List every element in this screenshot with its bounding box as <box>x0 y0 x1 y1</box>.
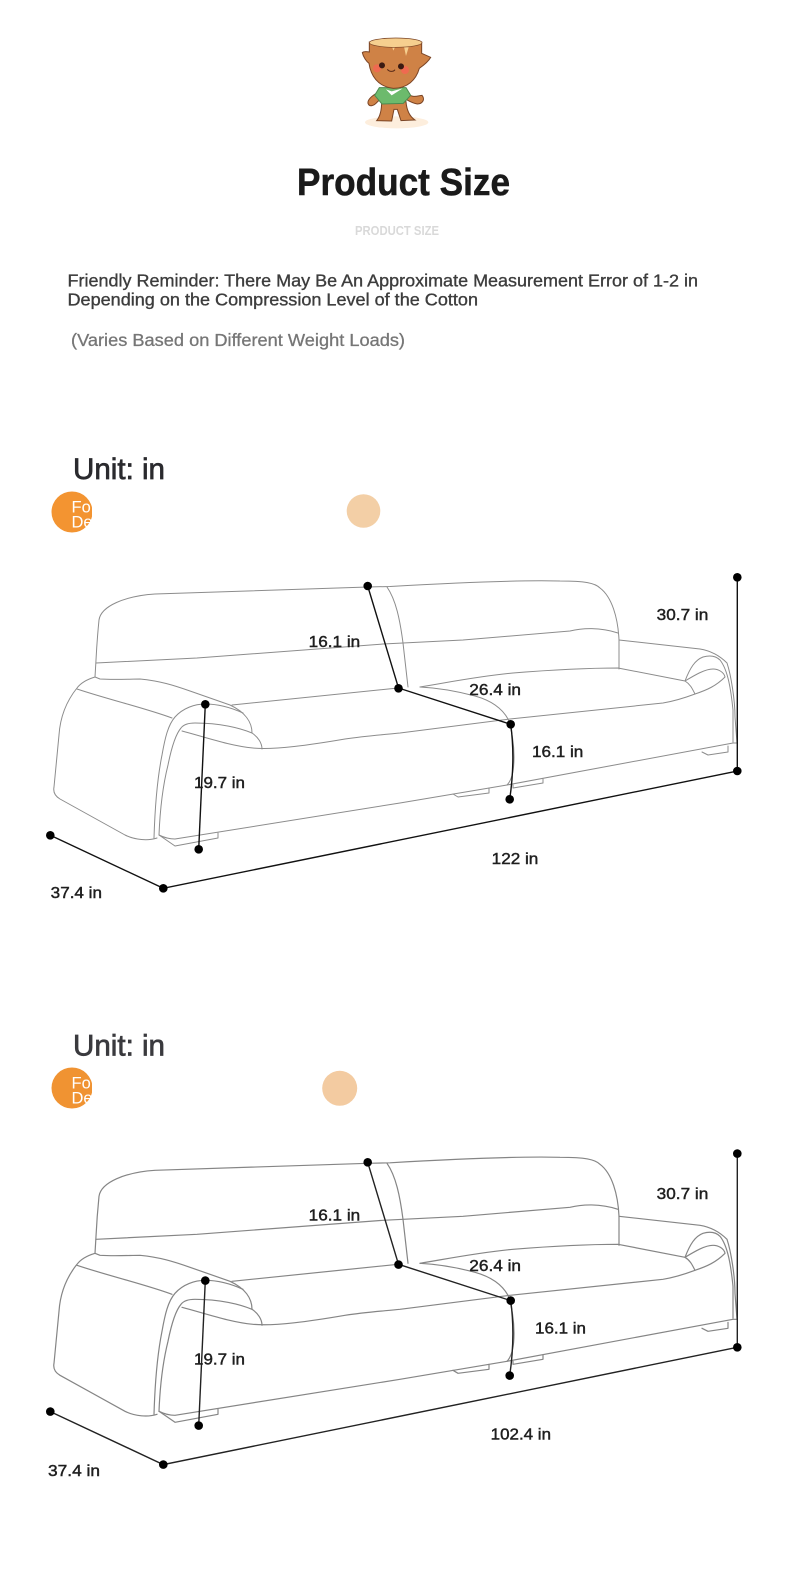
dimension labels 1: 19.7 in <box>194 775 245 792</box>
dimension labels 2 <box>48 1186 708 1480</box>
unit heading 2: Unit: in <box>73 1030 165 1063</box>
unit heading 1: Unit: in <box>73 453 165 486</box>
dimension labels 1: 16.1 in <box>309 634 360 651</box>
dimension labels 1: 37.4 in <box>51 885 102 902</box>
title: Product Size <box>297 162 510 204</box>
icon: tree stump mascot <box>362 38 431 128</box>
dimension labels 2: 16.1 in <box>535 1320 586 1337</box>
peach dot 2 <box>322 1071 357 1106</box>
reminder text: Depending on the Compression Level of the Cotton <box>68 290 478 310</box>
orange badge 2: De <box>72 1089 93 1107</box>
reminder text: Friendly Reminder: There May Be An Approximate Measurement Error of 1-2 in <box>68 270 698 290</box>
orange badge 2 <box>52 1068 93 1108</box>
dimension labels 2: 19.7 in <box>194 1351 245 1368</box>
dimension labels 2: 26.4 in <box>469 1258 521 1275</box>
sofa outline 1 <box>54 581 737 846</box>
dimension labels 2: 30.7 in <box>657 1186 708 1203</box>
sofa diagram 2 <box>46 1149 742 1480</box>
orange badge 1 <box>52 492 93 532</box>
orange badge 1: De <box>72 513 93 531</box>
orange badge 1: Fo <box>72 498 91 516</box>
measurement lines 2 <box>50 1154 737 1465</box>
dimension labels 2: 102.4 in <box>491 1426 551 1443</box>
subtitle: PRODUCT SIZE <box>355 224 439 238</box>
orange badge 2: Fo <box>72 1074 91 1092</box>
dimension labels 2: 16.1 in <box>309 1208 360 1225</box>
dimension labels 1: 30.7 in <box>657 607 708 624</box>
peach dot 1 <box>347 494 380 528</box>
dimension labels 1: 26.4 in <box>469 682 521 699</box>
measurement dots 2 <box>46 1149 742 1469</box>
reminder text <box>68 270 698 310</box>
dimension labels 1: 16.1 in <box>532 744 583 761</box>
measurement dots 1 <box>46 573 742 893</box>
weight load note: (Varies Based on Different Weight Loads) <box>71 330 405 350</box>
sofa outline 2 <box>54 1157 737 1422</box>
dimension labels 1 <box>51 607 708 902</box>
dimension labels 1: 122 in <box>492 851 538 868</box>
sofa diagram 1 <box>46 573 742 902</box>
measurement lines 1 <box>50 577 737 888</box>
dimension labels 2: 37.4 in <box>48 1463 100 1480</box>
